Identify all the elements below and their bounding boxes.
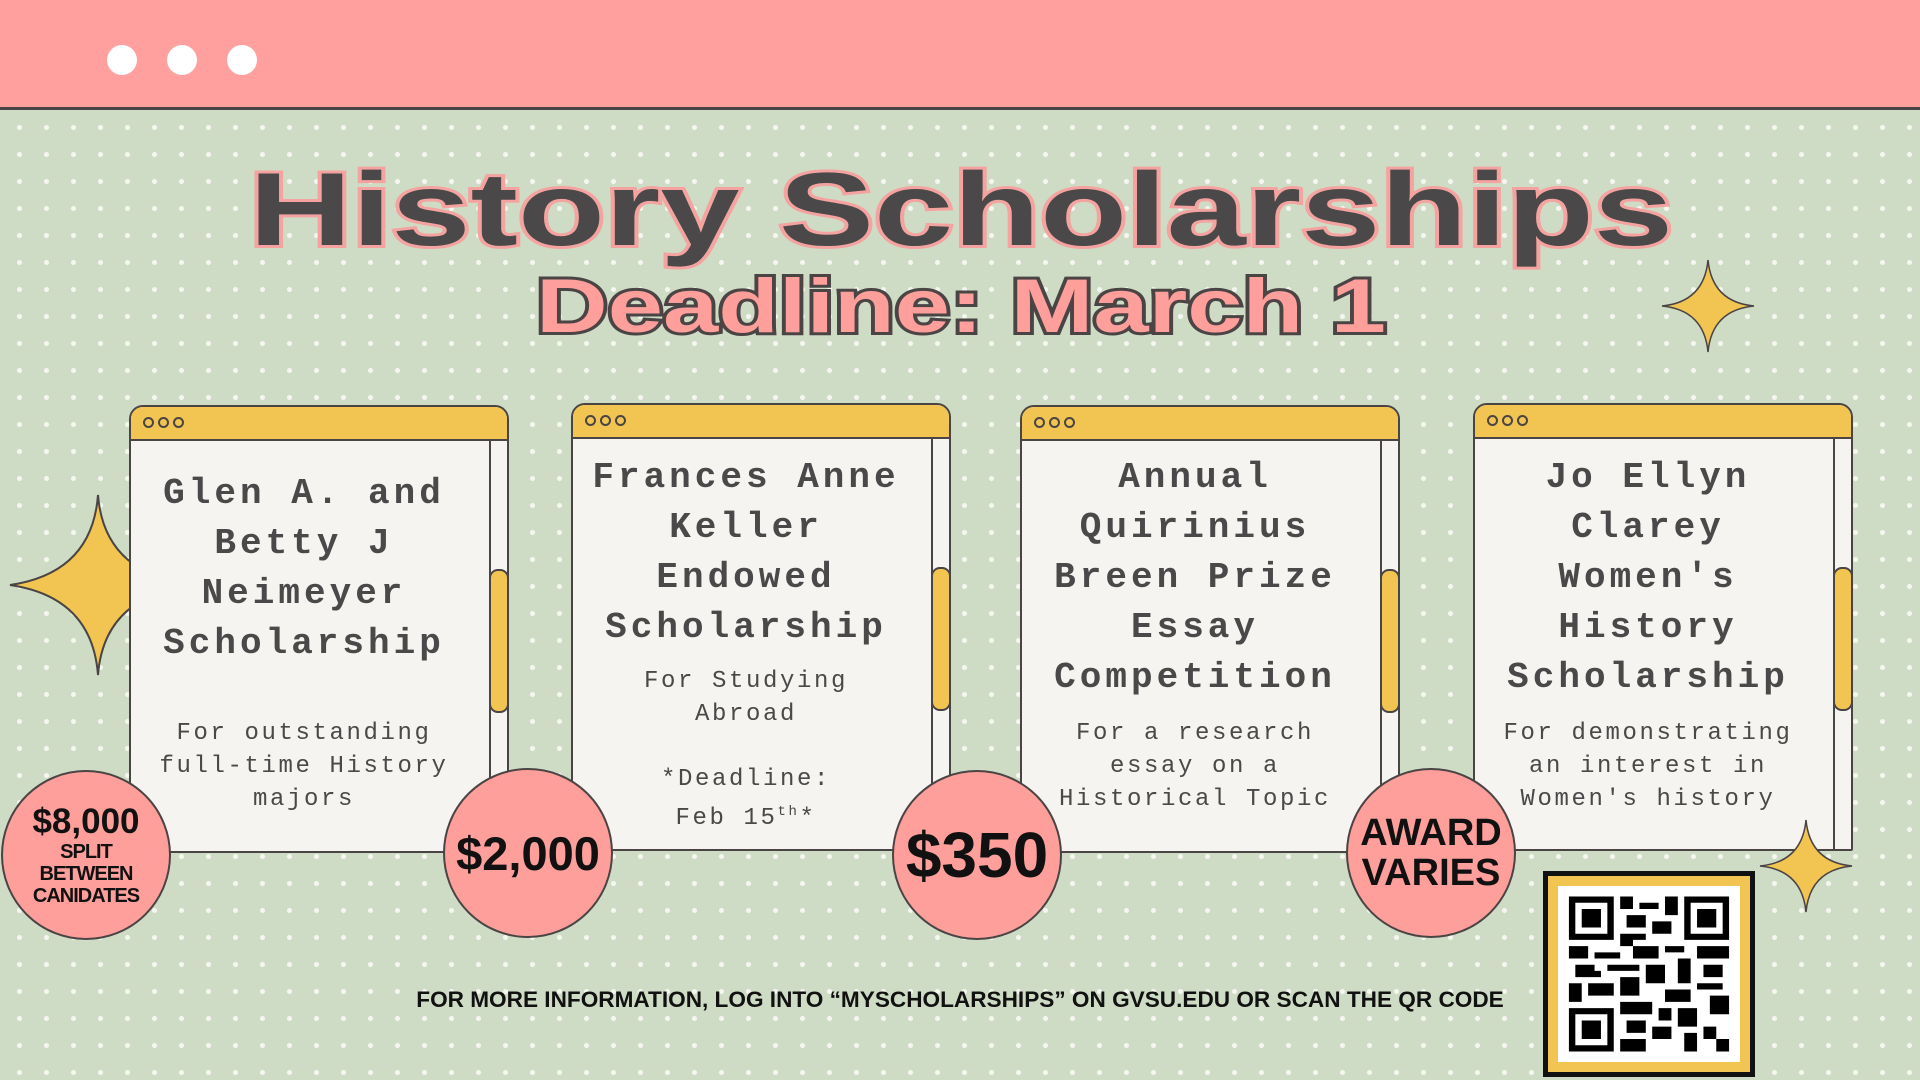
circle: award varies	[1346, 768, 1516, 938]
footer text: FOR MORE INFORMATION, LOG INTO “MYSCHOLARSHIPS” ON GVSU.EDU OR SCAN THE QR CODE	[416, 987, 1504, 1012]
card 1 description: majors	[253, 786, 355, 813]
card 2 deadline	[661, 766, 831, 832]
card 2 title: Frances Anne	[592, 457, 900, 498]
card 3 title: Annual	[1118, 457, 1272, 498]
card 1 title	[163, 473, 445, 664]
card 3 description: For a research	[1076, 720, 1314, 747]
card 2 title: Endowed	[656, 557, 836, 598]
circle: $8,000	[1, 770, 171, 940]
card 1 title: Neimeyer	[202, 573, 406, 614]
circle: $8,000: BETWEEN	[40, 863, 132, 885]
sparkle top right	[1662, 260, 1754, 352]
card 3 title: Breen Prize	[1054, 557, 1336, 598]
sparkle bottom right	[1760, 820, 1852, 912]
card 4 title: History	[1558, 607, 1738, 648]
circle: $2,000: $2,000	[456, 826, 600, 880]
circle: $8,000: CANIDATES	[33, 885, 139, 907]
card 3 description: essay on a	[1110, 753, 1280, 780]
card 2 description: Abroad	[695, 701, 797, 728]
card 4 description	[1503, 720, 1793, 813]
card 4	[1473, 403, 1853, 851]
circle: $8,000: $8,000	[32, 802, 140, 841]
card 3 title	[1054, 457, 1336, 698]
card 1	[129, 405, 509, 853]
card 4 title: Women's	[1558, 557, 1738, 598]
card 3 description	[1059, 720, 1331, 813]
sparkle left	[10, 494, 129, 676]
card 1 title: Glen A. and	[163, 473, 445, 514]
circle: award varies: VARIES	[1362, 852, 1500, 894]
card 4 title: Clarey	[1571, 507, 1725, 548]
circle: award varies: AWARD	[1360, 812, 1502, 854]
card 3 title: Essay	[1131, 607, 1259, 648]
card 4 title	[1507, 457, 1789, 698]
card 1 description: full-time History	[159, 753, 449, 780]
card 4 description: For demonstrating	[1503, 720, 1793, 747]
title: Deadline: March 1	[536, 264, 1386, 349]
window dots	[107, 45, 257, 75]
card 2	[571, 403, 951, 851]
card 4 title: Scholarship	[1507, 657, 1789, 698]
card 1 description	[159, 720, 449, 813]
card 1 title: Betty J	[214, 523, 394, 564]
card 3	[1020, 405, 1400, 853]
circle: $2,000	[443, 768, 613, 938]
card 3 title: Competition	[1054, 657, 1336, 698]
title: History Scholarships	[249, 152, 1673, 268]
card 3 title: Quirinius	[1080, 507, 1310, 548]
card 1 title: Scholarship	[163, 623, 445, 664]
card 4 description: Women's history	[1520, 786, 1776, 813]
card 2 description	[644, 668, 848, 728]
circle: $350: $350	[906, 819, 1048, 891]
title	[249, 152, 1673, 349]
card 1 description: For outstanding	[176, 720, 432, 747]
card 2 deadline: Feb 15th*	[675, 804, 817, 832]
circle: $8,000: SPLIT	[60, 841, 112, 863]
top bar	[0, 0, 1920, 110]
card 2 title	[592, 457, 900, 648]
card 2 description: For Studying	[644, 668, 848, 695]
card 4 title: Jo Ellyn	[1546, 457, 1750, 498]
card 4 description: an interest in	[1529, 753, 1767, 780]
card 2 title: Keller	[669, 507, 823, 548]
QR code	[1543, 871, 1755, 1077]
card 2 deadline: *Deadline:	[661, 766, 831, 793]
card 3 description: Historical Topic	[1059, 786, 1331, 813]
card 2 title: Scholarship	[605, 607, 887, 648]
circle: $350	[892, 770, 1062, 940]
